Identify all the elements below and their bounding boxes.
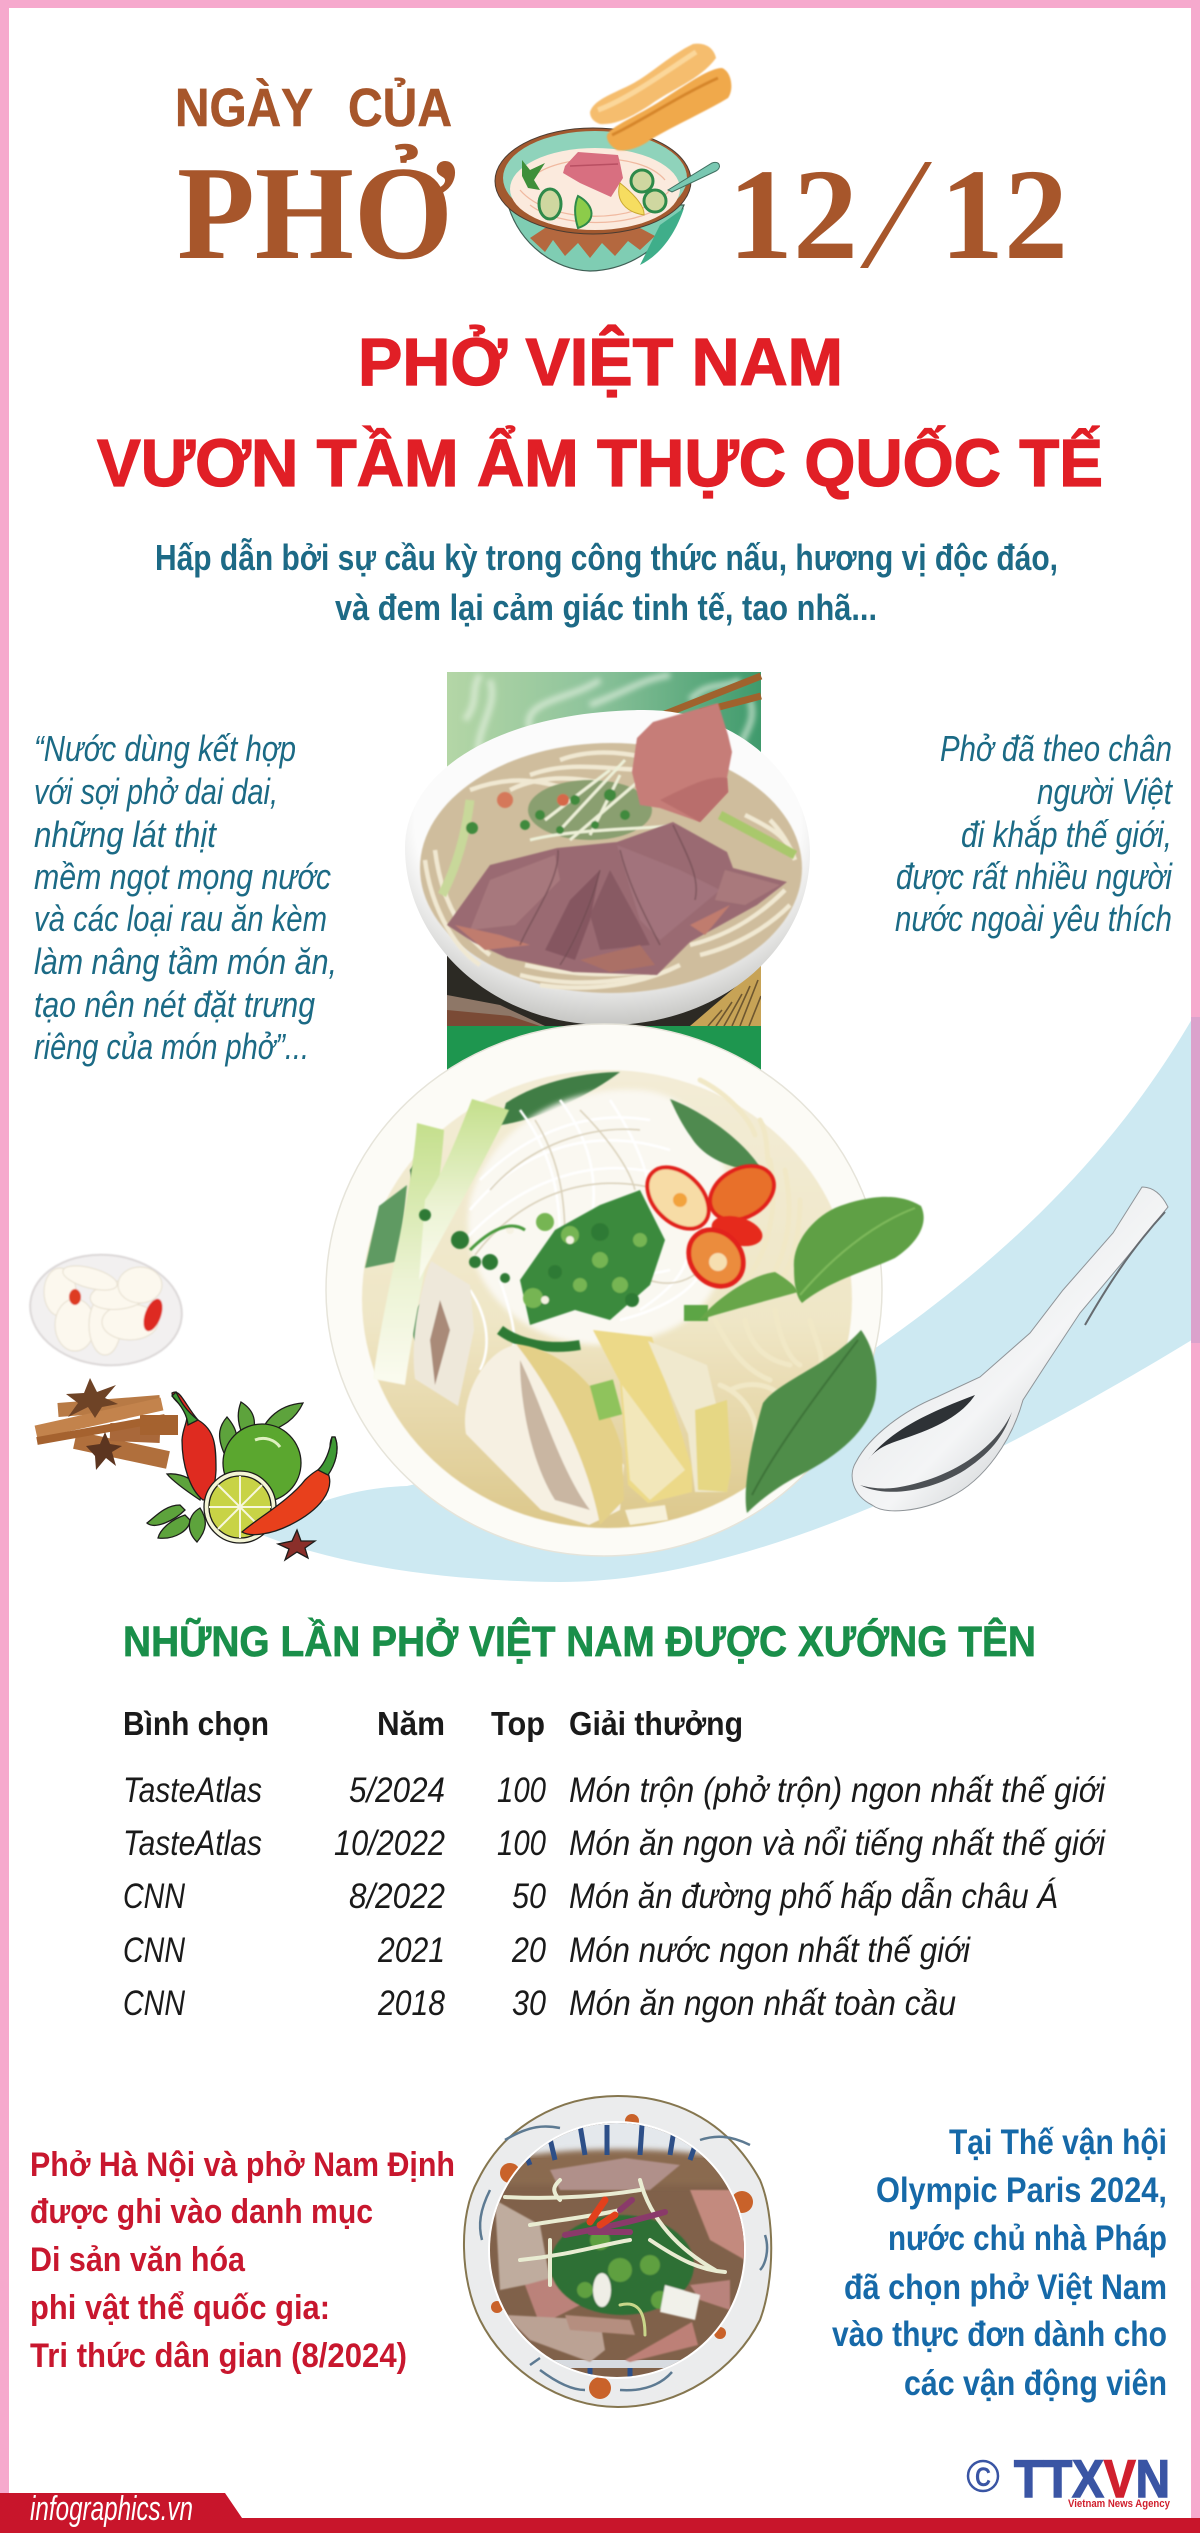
scallions <box>373 1099 509 1385</box>
title <box>97 325 1103 501</box>
section heading: awards: NHỮNG LẦN PHỞ VIỆT NAM ĐƯỢC XƯỚNG TÊN <box>123 1617 1036 1666</box>
footer site name: infographics.vn <box>30 2490 193 2528</box>
photo: pho on decorated plate <box>464 2096 771 2407</box>
table header <box>123 1705 743 1742</box>
right quote text <box>895 728 1174 939</box>
pickled garlic dish <box>25 1247 187 1373</box>
copyright mark: C <box>975 2462 991 2492</box>
beef slices <box>447 822 787 975</box>
table rows: TasteAtlas <box>123 1771 262 1810</box>
heading: Phở: PHỞ <box>177 139 456 287</box>
heading: Ngày của: CỦA <box>348 78 452 138</box>
right quote text: người Việt <box>1037 771 1174 812</box>
table header: Năm <box>377 1705 445 1742</box>
light blue swoosh <box>262 1005 1200 1582</box>
photo: chicken pho bowl <box>326 1024 924 1556</box>
lifted beef slice <box>632 703 732 822</box>
table rows: 2021 <box>377 1931 445 1970</box>
chopped herbs <box>419 1190 708 1347</box>
table rows: Món trộn (phở trộn) ngon nhất thế giới <box>569 1771 1106 1810</box>
left quote text <box>34 728 337 1067</box>
table rows: CNN <box>123 1877 186 1916</box>
noodles <box>468 1090 730 1345</box>
lime <box>223 1424 301 1502</box>
wordmark: TTXVN <box>1014 2450 1170 2509</box>
table rows: 2018 <box>377 1984 445 2023</box>
table rows: 20 <box>511 1931 546 1970</box>
bowl <box>326 1024 882 1556</box>
lime half <box>204 1471 276 1543</box>
callout: Olympic Paris 2024 <box>832 2123 1167 2403</box>
footer bar <box>0 2490 1200 2533</box>
star anise <box>278 1530 315 1560</box>
icon: illustrated pho bowl <box>495 44 731 271</box>
table rows: CNN <box>123 1984 186 2023</box>
small basil leaf <box>699 1272 798 1320</box>
left quote text: với sợi phở dai dai, <box>34 771 278 812</box>
table rows: CNN <box>123 1931 186 1970</box>
table rows: 5/2024 <box>349 1771 445 1810</box>
copyright mark <box>968 2461 998 2492</box>
left quote text: “Nước dùng kết hợp <box>34 728 296 769</box>
callout: Olympic Paris 2024: các vận động viên <box>904 2364 1167 2403</box>
table rows: 50 <box>512 1877 546 1916</box>
chicken pieces <box>414 1261 731 1525</box>
basil leaf top <box>670 1099 763 1172</box>
photo: beef pho bowl <box>405 672 810 1026</box>
noodles and herbs <box>425 753 795 988</box>
table rows: TasteAtlas <box>123 1824 262 1863</box>
basil bottom right <box>746 1330 877 1513</box>
table: awards <box>123 1705 1106 2023</box>
callout: national heritage: Phở Hà Nội và phở Nam Định <box>30 2146 455 2184</box>
callout: national heritage: phi vật thể quốc gia: <box>30 2289 330 2327</box>
left quote text: tạo nên nét đặt trưng <box>34 984 315 1025</box>
table rows: 10/2022 <box>334 1824 445 1863</box>
table header: Top <box>491 1705 545 1742</box>
subtitle <box>155 537 1058 628</box>
left quote text: mềm ngọt mọng nước <box>34 856 331 897</box>
spoon <box>852 1187 1168 1511</box>
table rows: Món ăn ngon và nổi tiếng nhất thế giới <box>569 1824 1106 1863</box>
heading: Ngày của: NGÀY <box>175 78 313 138</box>
table rows: 100 <box>497 1771 546 1810</box>
right chilli <box>242 1437 337 1535</box>
bean sprouts <box>700 1080 821 1440</box>
date: 12/12 <box>728 143 1068 287</box>
table rows: 30 <box>512 1984 546 2023</box>
table rows: Món nước ngon nhất thế giới <box>569 1931 971 1970</box>
left quote text: những lát thịt <box>34 814 218 855</box>
table rows: Món ăn đường phố hấp dẫn châu Á <box>569 1877 1058 1916</box>
table rows: 100 <box>497 1824 546 1863</box>
basil top right <box>794 1197 924 1303</box>
date: 12/12: 12 <box>728 143 858 287</box>
tagline: Vietnam News Agency <box>1068 2498 1171 2510</box>
left quote text: riêng của món phở”... <box>34 1026 309 1067</box>
left chilli <box>172 1392 216 1500</box>
callout: Olympic Paris 2024: Tại Thế vận hội <box>949 2123 1167 2162</box>
cinnamon and star anise <box>36 1378 178 1470</box>
callout: Olympic Paris 2024: Olympic Paris 2024, <box>876 2171 1167 2210</box>
title: VƯƠN TẦM ẨM THỰC QUỐC TẾ <box>97 425 1103 501</box>
header: Ngày của Phở 12/12 <box>175 44 1068 287</box>
photo backdrop <box>447 672 761 1026</box>
table rows: 8/2022 <box>349 1877 445 1916</box>
chillies and limes illustration <box>147 1392 337 1560</box>
table header: Giải thưởng <box>569 1705 743 1742</box>
callout: national heritage: Di sản văn hóa <box>30 2241 246 2279</box>
subtitle: và đem lại cảm giác tinh tế, tao nhã... <box>335 587 877 628</box>
bowl <box>405 710 810 1025</box>
chopsticks <box>660 676 761 716</box>
left quote text: và các loại rau ăn kèm <box>34 898 327 939</box>
date: 12/12: 12 <box>940 143 1068 287</box>
callout: national heritage: được ghi vào danh mục <box>30 2193 373 2231</box>
chilli slices <box>636 1155 783 1297</box>
table rows: Món ăn ngon nhất toàn cầu <box>569 1984 956 2023</box>
title: PHỞ VIỆT NAM <box>358 325 843 400</box>
plate <box>464 2096 771 2407</box>
logo: TTXVN <box>968 2450 1171 2510</box>
photo circle <box>488 2121 746 2379</box>
callout: national heritage: Tri thức dân gian (8/2024) <box>30 2337 407 2375</box>
icon: fried dough sticks <box>590 44 731 151</box>
table rows <box>123 1771 1106 2023</box>
table header: Bình chọn <box>123 1705 269 1742</box>
leaves <box>147 1402 303 1542</box>
left quote text: làm nâng tầm món ăn, <box>34 941 337 982</box>
callout: national heritage <box>30 2146 455 2375</box>
dark herbs behind <box>365 1072 620 1347</box>
heading: Ngày của <box>175 78 452 138</box>
green backing panel <box>447 1026 761 1072</box>
